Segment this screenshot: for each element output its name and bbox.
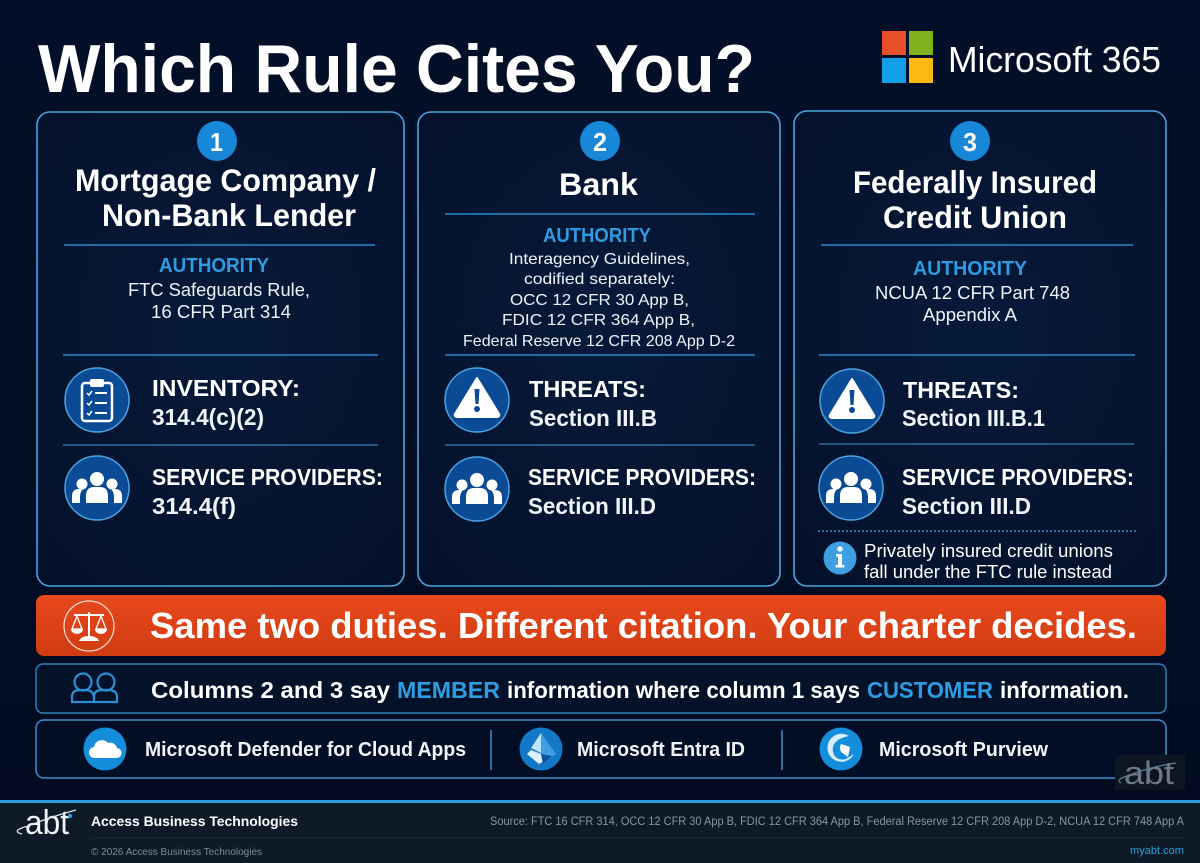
threats citation: THREATS: [903, 377, 1019, 403]
website: myabt.com [1130, 845, 1184, 857]
authority text: Appendix A [923, 305, 1017, 325]
authority text: Interagency Guidelines, [509, 251, 690, 268]
tools bar [36, 720, 1166, 778]
icon: entra [520, 728, 562, 770]
credit union note [864, 541, 1113, 582]
number badge 3: 3 [963, 127, 977, 157]
service providers citation: SERVICE PROVIDERS: [528, 464, 756, 490]
authority text [875, 258, 1070, 325]
panel: mortgage company / non-bank lender [37, 112, 404, 586]
inventory citation: INVENTORY: [152, 375, 300, 401]
service providers citation [528, 464, 756, 519]
service providers citation: Section III.D [528, 493, 656, 519]
icon: people [819, 456, 883, 520]
tool: entra: Microsoft Entra ID [577, 738, 745, 761]
footer logo: abt: abt [25, 804, 70, 842]
authority text: codified separately: [524, 271, 675, 288]
note text: information. [1000, 677, 1129, 703]
icon: warning [820, 369, 884, 433]
note text: information where column 1 says [507, 677, 860, 703]
icon: scales [64, 601, 114, 651]
number badge 2: 2 [593, 127, 607, 157]
authority text [463, 225, 735, 350]
note text: CUSTOMER [867, 677, 993, 703]
panel heading [75, 162, 376, 233]
authority text [128, 255, 310, 322]
copyright: © 2026 Access Business Technologies [91, 847, 262, 858]
note text [151, 677, 1129, 703]
service providers citation: 314.4(f) [152, 493, 236, 519]
threats citation: THREATS: [529, 376, 646, 402]
number badge 3 [950, 121, 990, 161]
panel heading: Credit Union [883, 199, 1067, 235]
panel heading: Mortgage Company / [75, 162, 376, 198]
authority text: FTC Safeguards Rule, [128, 280, 310, 300]
authority text: OCC 12 CFR 30 App B, [510, 292, 689, 309]
note text: MEMBER [397, 677, 500, 703]
icon: members outline [72, 674, 117, 702]
credit union note: fall under the FTC rule instead [864, 562, 1112, 582]
source line: Source: FTC 16 CFR 314, OCC 12 CFR 30 App B, FDIC 12 CFR 364 App B, Federal Reserve 12 CFR 208 App D-2, NCUA 12 CFR 748 App A [490, 816, 1184, 828]
panel: bank [418, 112, 780, 586]
panel: federally insured credit union [794, 111, 1166, 586]
authority text: AUTHORITY [913, 258, 1028, 280]
service providers citation: Section III.D [902, 493, 1031, 519]
threats citation: Section III.B [529, 405, 657, 431]
service providers citation: SERVICE PROVIDERS: [152, 464, 383, 490]
banner: key message [36, 595, 1166, 656]
icon: clipboard [65, 368, 129, 432]
threats citation: Section III.B.1 [902, 405, 1045, 431]
threats citation [529, 376, 657, 431]
authority text: NCUA 12 CFR Part 748 [875, 283, 1070, 303]
authority text: FDIC 12 CFR 364 App B, [502, 312, 695, 329]
note text: Columns 2 and 3 say [151, 677, 390, 703]
panel heading: Federally Insured [853, 164, 1097, 200]
authority text: AUTHORITY [543, 225, 652, 247]
inventory citation [152, 375, 300, 430]
service providers citation [152, 464, 383, 519]
service providers citation [902, 464, 1134, 519]
inventory citation: 314.4(c)(2) [152, 404, 264, 430]
panel heading [853, 164, 1097, 235]
credit union note: Privately insured credit unions [864, 541, 1113, 561]
number badge 2 [580, 121, 620, 161]
footer [0, 800, 1200, 863]
threats citation [902, 377, 1045, 431]
service providers citation: SERVICE PROVIDERS: [902, 464, 1134, 490]
icon: people [65, 456, 129, 520]
company name: Access Business Technologies [91, 814, 298, 829]
tool: purview: Microsoft Purview [879, 738, 1048, 761]
icon: people [445, 457, 509, 521]
title: Which Rule Cites You? [38, 31, 755, 107]
icon: purview [820, 728, 862, 770]
icon: warning [445, 368, 509, 432]
panel heading: Bank [559, 166, 638, 202]
icon: info [824, 542, 856, 574]
watermark: abt logo [1115, 755, 1185, 791]
logo: Microsoft 365: Microsoft 365 [948, 39, 1161, 80]
tool: defender: Microsoft Defender for Cloud Apps [145, 738, 466, 761]
authority text: Federal Reserve 12 CFR 208 App D-2 [463, 333, 735, 350]
watermark: abt logo: abt [1124, 755, 1174, 791]
authority text: 16 CFR Part 314 [151, 302, 291, 322]
logo: Microsoft 365 [882, 31, 1161, 83]
panel heading: Non-Bank Lender [102, 197, 356, 233]
note bar: member versus customer [36, 664, 1166, 713]
number badge 1 [197, 121, 237, 161]
banner text: Same two duties. Different citation. Your charter decides. [150, 605, 1137, 646]
authority text: AUTHORITY [159, 255, 270, 277]
number badge 1: 1 [210, 127, 223, 157]
icon: cloud [84, 728, 126, 770]
